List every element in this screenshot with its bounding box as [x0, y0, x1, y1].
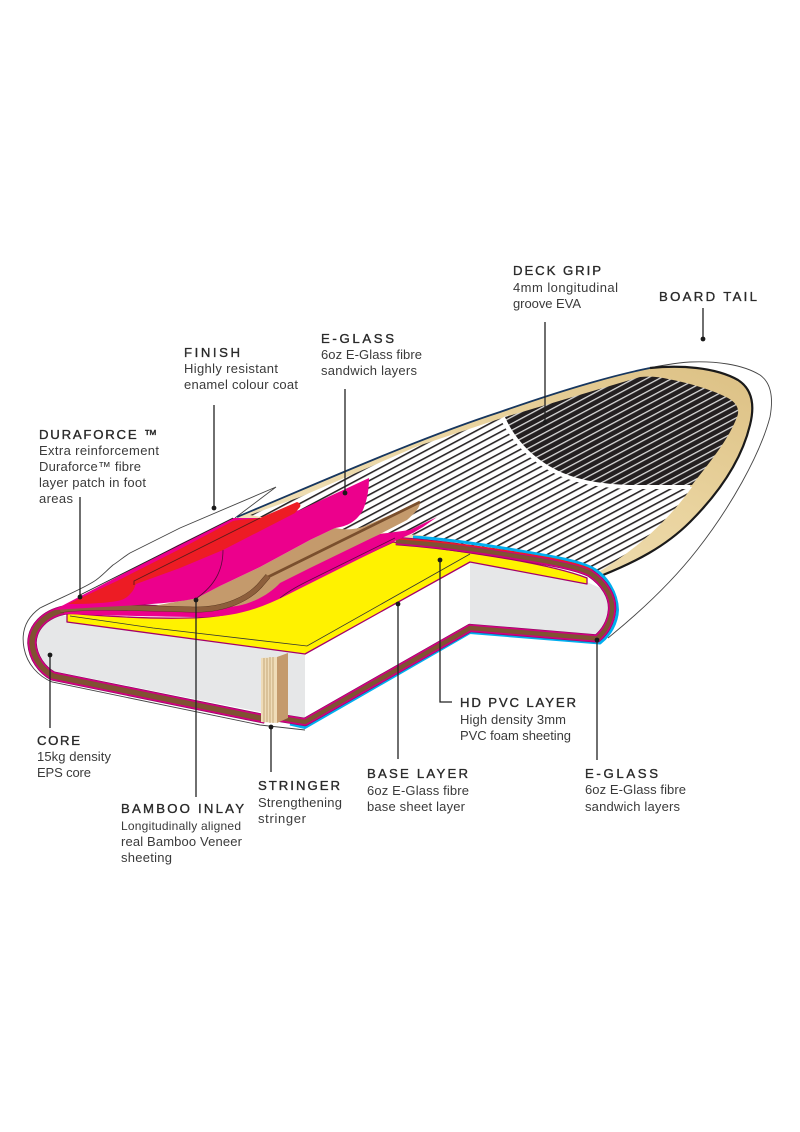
label: bamboo inlay: Longitudinally aligned: [121, 819, 241, 833]
gap around deck grip: [504, 417, 690, 485]
bamboo tail: [237, 367, 752, 575]
label: board tail: BOARD TAIL: [659, 289, 757, 304]
label: finish: enamel colour coat: [184, 377, 298, 392]
label: core: EPS core: [37, 765, 91, 780]
label: core: CORE: [37, 733, 80, 748]
label: hd pvc layer: [460, 695, 576, 743]
label: stringer: stringer: [258, 811, 307, 826]
label: e-glass bottom: [585, 766, 686, 814]
label: finish: [184, 345, 298, 392]
label: bamboo inlay: [121, 801, 244, 865]
label: duraforce: [39, 427, 159, 506]
core left section: [37, 615, 305, 720]
label: e-glass bottom: E-GLASS: [585, 766, 658, 781]
label: core: 15kg density: [37, 749, 112, 764]
core right section: [470, 562, 608, 636]
label: duraforce: layer patch in foot: [39, 475, 146, 490]
leader lines: [48, 308, 705, 797]
deck grip pad: [505, 377, 738, 485]
label: finish: Highly resistant: [184, 361, 278, 376]
label: duraforce: Extra reinforcement: [39, 443, 159, 458]
label: stringer: [258, 778, 342, 826]
bamboo inlay: [60, 502, 420, 610]
label: stringer: Strengthening: [258, 795, 342, 810]
label: e-glass top: E-GLASS: [321, 331, 394, 346]
label: hd pvc layer: HD PVC LAYER: [460, 695, 576, 710]
grooved deck: [250, 417, 692, 573]
label: base layer: base sheet layer: [367, 799, 466, 814]
label: e-glass top: sandwich layers: [321, 363, 418, 378]
label: deck grip: DECK GRIP: [513, 263, 601, 278]
label: deck grip: groove EVA: [513, 296, 581, 311]
label: deck grip: 4mm longitudinal: [513, 280, 618, 295]
label: stringer: STRINGER: [258, 778, 340, 793]
label: bamboo inlay: real Bamboo Veneer: [121, 834, 243, 849]
label: hd pvc layer: PVC foam sheeting: [460, 728, 571, 743]
left shell layers: [32, 608, 265, 719]
label: e-glass top: 6oz E-Glass fibre: [321, 347, 422, 362]
label: base layer: BASE LAYER: [367, 766, 468, 781]
label: duraforce: areas: [39, 491, 74, 506]
label: base layer: [367, 766, 469, 814]
label: duraforce: DURAFORCE ™: [39, 427, 157, 442]
label: deck grip: [513, 263, 618, 311]
label: duraforce: Duraforce™ fibre: [39, 459, 141, 474]
label: hd pvc layer: High density 3mm: [460, 712, 566, 727]
HD PVC yellow layer: [67, 542, 587, 654]
board outline: [23, 362, 772, 730]
upper E-glass sheet: [54, 478, 369, 610]
stringer: [261, 653, 288, 723]
label: finish: FINISH: [184, 345, 240, 360]
Duraforce patch: [68, 502, 300, 604]
label: e-glass bottom: sandwich layers: [585, 799, 680, 814]
label: core: [37, 733, 112, 780]
label: base layer: 6oz E-Glass fibre: [367, 783, 469, 798]
core side white cut: [305, 562, 470, 720]
label: bamboo inlay: sheeting: [121, 850, 172, 865]
right shell layers: [262, 537, 618, 728]
board illustration: [23, 362, 772, 730]
label: e-glass bottom: 6oz E-Glass fibre: [585, 782, 686, 797]
label: bamboo inlay: BAMBOO INLAY: [121, 801, 244, 816]
label: e-glass top: [321, 331, 422, 378]
lower E-glass sheet: [64, 517, 437, 617]
